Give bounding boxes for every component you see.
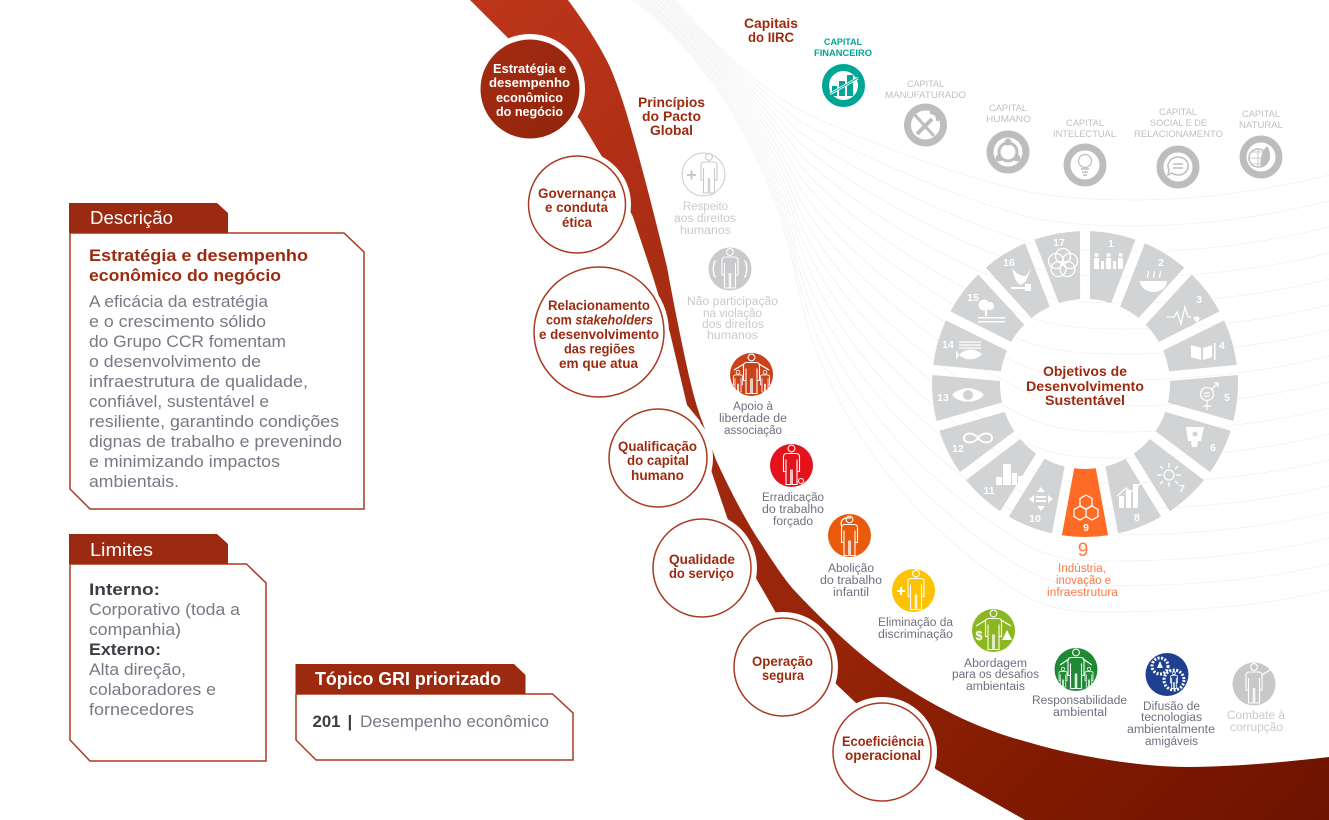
- capital: financeiro: FINANCEIRO: [814, 48, 872, 59]
- capital: social e de relacionamento: [1134, 107, 1223, 185]
- panel: descrição: e o crescimento sólido: [89, 312, 266, 331]
- panel: descrição: [69, 203, 364, 509]
- principle: combate à corrupção: corrupção: [1230, 722, 1283, 734]
- panel: limites: fornecedores: [89, 700, 194, 719]
- principle: abordagem para os desafios ambientais: Abordagem: [964, 658, 1027, 670]
- principle: apoio à liberdade de associação: Apoio à: [733, 401, 774, 413]
- SDG numbers: 8: [1134, 512, 1140, 524]
- SDG numbers: 15: [967, 292, 979, 304]
- topic: Qualidade: Qualidade: [669, 552, 735, 567]
- principle: erradicação do trabalho forçado: [762, 444, 824, 528]
- topic: Qualificação: Qualificação: [618, 439, 697, 454]
- heading: Capitais do IIRC: [744, 16, 798, 45]
- panel: descrição: infraestrutura de qualidade,: [89, 372, 308, 391]
- heading: Princípios do Pacto Global: do Pacto: [642, 109, 701, 124]
- topic: Ecoeficiência: Ecoeficiência: [842, 734, 924, 749]
- capital: social e de relacionamento: RELACIONAMENTO: [1134, 129, 1223, 140]
- SDG center title: Desenvolvimento: [1026, 379, 1144, 394]
- principle: não participação: dos direitos: [702, 319, 764, 331]
- principle: abolição do trabalho infantil: [820, 514, 882, 599]
- principle: respeito: Respeito: [683, 201, 728, 213]
- SDG numbers: 16: [1003, 257, 1015, 269]
- principle: apoio à liberdade de associação: liberdade de: [719, 413, 787, 425]
- SDG 9 label: infraestrutura: [1047, 587, 1119, 599]
- topic: Estratégia e desempenho (active): desempenho: [489, 75, 570, 90]
- topic: Governança: Governança: [538, 186, 616, 201]
- principle: abolição do trabalho infantil: do trabalho: [820, 575, 882, 587]
- capital: natural: [1239, 109, 1283, 175]
- SDG center title: Objetivos de: [1043, 364, 1127, 379]
- principle: difusão de tecnologias: amigáveis: [1145, 736, 1198, 748]
- SDG numbers: [937, 237, 1230, 534]
- topic: Operação: segura: [762, 668, 804, 683]
- heading: Princípios do Pacto Global: Princípios: [638, 95, 705, 110]
- principle: apoio à liberdade de associação: associação: [724, 425, 782, 437]
- panel: descrição: dignas de trabalho e prevenindo: [89, 432, 342, 451]
- principle: responsabilidade ambiental: [1032, 648, 1127, 719]
- capital: manufaturado: [885, 79, 966, 143]
- capital: intelectual: CAPITAL: [1066, 118, 1104, 129]
- principle: eliminação da discriminação: [878, 569, 954, 641]
- topic: Estratégia e desempenho (active): do negócio: [496, 104, 563, 119]
- principle: não participação: [687, 248, 778, 342]
- principle: difusão de tecnologias: [1127, 653, 1215, 748]
- topic: Relacionamento: Relacionamento: [548, 298, 650, 313]
- white halos cutting the swoosh: [475, 34, 937, 807]
- SDG center title: [1026, 364, 1144, 408]
- SDG numbers: 5: [1224, 392, 1230, 404]
- panel: descrição: confiável, sustentável e: [89, 392, 269, 411]
- principle: difusão de tecnologias: Difusão de: [1143, 701, 1200, 713]
- SDG 9 label: [1047, 540, 1119, 599]
- principle: abolição do trabalho infantil: infantil: [833, 587, 869, 599]
- panel: descrição: resiliente, garantindo condições: [89, 412, 339, 431]
- panel: tópico GRI: [296, 664, 573, 760]
- SDG 9 label: Indústria,: [1058, 563, 1106, 575]
- panel: limites: Externo:: [89, 640, 161, 659]
- SDG numbers: 14: [942, 339, 954, 351]
- principle: eliminação da discriminação: discriminação: [878, 629, 953, 641]
- topic: Relacionamento: das regiões: [564, 342, 635, 356]
- capital: humano: CAPITAL: [989, 103, 1027, 114]
- panel: limites: Limites: [90, 540, 153, 560]
- topic: Governança: e conduta: [545, 200, 608, 215]
- principle: abordagem para os desafios ambientais: [952, 609, 1039, 693]
- SDG numbers: 2: [1158, 257, 1164, 269]
- panel: limites: Alta direção,: [89, 660, 186, 679]
- SDG center title: Sustentável: [1045, 393, 1125, 408]
- SDG numbers: 6: [1210, 442, 1216, 454]
- SDG 9 label: inovação e: [1056, 575, 1111, 587]
- SDG numbers: 10: [1029, 513, 1041, 525]
- background fan of fine lines: [633, 0, 1329, 612]
- principle: combate à corrupção: Combate à: [1227, 710, 1286, 722]
- topic: Operação: Operação: [752, 654, 813, 669]
- principle: respeito: [674, 153, 736, 237]
- SDG numbers: 4: [1219, 340, 1225, 352]
- panel: descrição: o desenvolvimento de: [89, 352, 261, 371]
- SDG wheel: [931, 229, 1239, 537]
- principle: erradicação do trabalho forçado: do trabalho: [762, 504, 824, 516]
- SDG numbers: 7: [1179, 483, 1185, 495]
- heading: Capitais do IIRC: do IIRC: [748, 30, 794, 45]
- panel: descrição: do Grupo CCR fomentam: [89, 332, 286, 351]
- topic: Governança: [528, 156, 626, 253]
- red swoosh: [470, 0, 1329, 820]
- capital: financeiro: [814, 37, 872, 104]
- panel: limites: Corporativo (toda a: [89, 600, 241, 619]
- principle: abolição do trabalho infantil: Abolição: [828, 563, 874, 575]
- principle: não participação: na violação: [703, 308, 762, 320]
- principle: abordagem para os desafios ambientais: para os desafios: [952, 669, 1039, 681]
- topic: Qualificação: [609, 409, 707, 507]
- SDG numbers: 13: [937, 392, 949, 404]
- capital: manufaturado: MANUFATURADO: [885, 90, 966, 101]
- topic: Estratégia e desempenho (active): Estratégia e: [493, 61, 566, 76]
- SDG numbers: 9: [1083, 522, 1089, 534]
- SDG 9 label: 9: [1078, 540, 1088, 561]
- principle: erradicação do trabalho forçado: forçado: [773, 516, 813, 528]
- heading: Princípios do Pacto Global: [638, 95, 705, 138]
- heading: Capitais do IIRC: Capitais: [744, 16, 798, 31]
- panel: descrição: Estratégia e desempenho: [89, 246, 308, 265]
- capital: intelectual: INTELECTUAL: [1053, 129, 1116, 140]
- principle: apoio à liberdade de associação: [719, 353, 787, 437]
- principle: eliminação da discriminação: Eliminação da: [878, 617, 954, 629]
- SDG numbers: 11: [983, 485, 995, 497]
- panel: descrição: ambientais.: [89, 472, 179, 491]
- capital: intelectual: [1053, 118, 1116, 183]
- topic: Relacionamento: [534, 267, 664, 397]
- SDG numbers: 17: [1053, 237, 1065, 249]
- principle: responsabilidade ambiental: ambiental: [1053, 707, 1107, 719]
- capital: manufaturado: CAPITAL: [907, 79, 944, 90]
- capital: social e de relacionamento: SOCIAL E DE: [1150, 118, 1207, 129]
- panel: limites: colaboradores e: [89, 680, 216, 699]
- panel: descrição: Descrição: [90, 208, 173, 228]
- panel: descrição: econômico do negócio: [89, 266, 281, 285]
- principle: respeito: humanos: [680, 225, 731, 237]
- SDG icons: [952, 248, 1218, 520]
- principle: difusão de tecnologias: ambientalmente: [1127, 724, 1215, 736]
- topic: Qualificação: humano: [631, 468, 684, 483]
- topic: Qualidade: [653, 519, 751, 617]
- principle: respeito: aos direitos: [674, 213, 736, 225]
- principle: abordagem para os desafios ambientais: ambientais: [966, 681, 1025, 693]
- panel: limites: companhia): [89, 620, 181, 639]
- topic: Estratégia e desempenho (active): [480, 40, 580, 138]
- topic: Relacionamento: com stakeholders: [546, 312, 653, 328]
- topic: Relacionamento: em que atua: [559, 356, 638, 371]
- topic: Ecoeficiência: [833, 703, 931, 801]
- principle: combate à corrupção: [1227, 662, 1286, 734]
- topic: Estratégia e desempenho (active): econômico: [496, 90, 563, 105]
- panel: tópico GRI: Desempenho econômico: [360, 712, 549, 731]
- capital: social e de relacionamento: CAPITAL: [1159, 107, 1197, 118]
- panel: descrição: A eficácia da estratégia: [89, 292, 269, 311]
- principle: não participação: Não participação: [687, 296, 778, 308]
- capital: natural: NATURAL: [1239, 120, 1283, 131]
- capital: humano: HUMANO: [986, 114, 1031, 125]
- topic: Governança: ética: [562, 215, 592, 230]
- topic: Relacionamento: e desenvolvimento: [539, 327, 659, 342]
- panel: tópico GRI: |: [348, 712, 352, 731]
- panel: limites: Interno:: [89, 580, 160, 599]
- SDG numbers: 3: [1196, 294, 1202, 306]
- capital: natural: CAPITAL: [1242, 109, 1280, 120]
- principle: abordagem para os desafios ambientais: $: [975, 628, 983, 643]
- panel: limites: [69, 534, 266, 761]
- principle: difusão de tecnologias: tecnologias: [1141, 712, 1202, 724]
- SDG numbers: 1: [1108, 238, 1114, 250]
- capital: humano: [986, 103, 1031, 170]
- capital: financeiro: CAPITAL: [824, 37, 862, 48]
- SDG numbers: 12: [952, 443, 964, 455]
- panel: tópico GRI: 201: [312, 712, 340, 731]
- principle: responsabilidade ambiental: Responsabilidade: [1032, 695, 1127, 707]
- topic: Qualificação: do capital: [627, 453, 689, 468]
- principle: erradicação do trabalho forçado: Erradicação: [762, 492, 824, 504]
- panel: tópico GRI: Tópico GRI priorizado: [315, 669, 501, 689]
- principle: não participação: humanos: [707, 330, 758, 342]
- heading: Princípios do Pacto Global: Global: [650, 123, 693, 138]
- panel: descrição: e minimizando impactos: [89, 452, 280, 471]
- SDG wedges: [931, 229, 1239, 537]
- topic: Operação: [734, 618, 832, 716]
- topic: Qualidade: do serviço: [669, 566, 734, 581]
- topic: Ecoeficiência: operacional: [845, 748, 921, 763]
